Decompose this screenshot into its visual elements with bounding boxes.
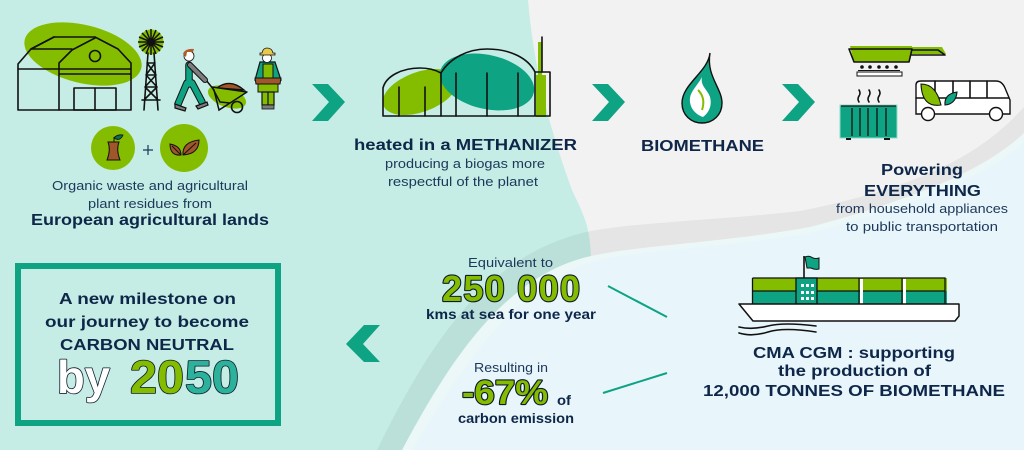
text: CMA CGM supporting — [703, 345, 1005, 400]
arrow: step 1 to 2 — [312, 84, 345, 121]
text: biomethane: BIOMETHANE — [641, 138, 764, 155]
text: -67% carbon emission — [458, 361, 574, 426]
icon: barn and greenhouse — [18, 37, 131, 110]
text: organic waste: plant residues from — [88, 197, 212, 211]
icon: apple core — [91, 126, 135, 170]
text: by 2050: 50 — [185, 351, 239, 403]
text: powering everything — [836, 162, 1008, 234]
icon: green blob behind barn — [18, 11, 148, 97]
connector line: ship to -67% — [603, 373, 667, 393]
text: methanizer: producing a biogas more — [385, 157, 545, 171]
text: organic waste: European agricultural lands — [31, 212, 269, 229]
text: -67% carbon emission: of — [557, 392, 571, 408]
arrow: step 3 to 4 — [782, 84, 815, 121]
text: powering everything: to public transportation — [846, 220, 998, 234]
text: powering everything: Powering — [881, 162, 963, 179]
text: 250 000 kms: 250 000 — [442, 268, 580, 309]
icon: container ship — [739, 256, 959, 335]
text: by 2050: 20 — [130, 351, 184, 403]
text: CMA CGM supporting: the production of — [778, 363, 932, 380]
icon: methanizer — [377, 37, 550, 124]
panel: carbon neutral callout: our journey to become — [45, 314, 249, 331]
icon: frying pan on stove — [849, 46, 946, 76]
icon: worker with wheelbarrow — [175, 49, 249, 113]
panel: carbon neutral callout — [18, 266, 278, 423]
icon: leaves — [160, 124, 208, 172]
icon: windmill — [138, 29, 164, 110]
text: organic waste: Organic waste and agricultural — [52, 179, 248, 193]
arrow: back to callout — [346, 325, 380, 362]
text: -67% carbon emission: -67% — [462, 374, 548, 412]
text: -67% carbon emission: carbon emission — [458, 410, 574, 426]
connector line: ship to 250 000 — [608, 286, 667, 317]
text: 250 000 kms: Equivalent to — [468, 256, 553, 270]
text: 250 000 kms: kms at sea for one year — [426, 306, 597, 322]
icon: biomethane drop — [682, 53, 722, 123]
illustration: farm, windmill and farmers — [18, 11, 281, 113]
panel: carbon neutral callout: CARBON NEUTRAL — [60, 337, 234, 354]
text: 250 000 kms — [426, 256, 597, 322]
panel: carbon neutral callout: A new milestone on — [59, 291, 236, 308]
text: methanizer: respectful of the planet — [388, 175, 539, 189]
text: CMA CGM supporting: 12,000 TONNES OF BIOMETHANE — [703, 383, 1005, 400]
text: powering everything: EVERYTHING — [864, 183, 981, 200]
icon: radiator — [840, 90, 897, 139]
text: powering everything: from household appliances — [836, 202, 1008, 216]
text: organic waste — [31, 179, 269, 229]
icon: bus with leaves — [916, 81, 1010, 120]
arrow: step 2 to 3 — [592, 84, 625, 121]
text: methanizer: heated in a METHANIZER — [354, 137, 578, 154]
text: by 2050: by — [57, 351, 110, 403]
icon: farmer with crate — [255, 48, 281, 109]
plus sign — [143, 145, 153, 155]
text: CMA CGM supporting: CMA CGM : supporting — [753, 345, 955, 362]
text: by 2050 — [57, 351, 239, 403]
text: methanizer — [354, 137, 578, 189]
text: -67% carbon emission: Resulting in — [474, 361, 548, 375]
